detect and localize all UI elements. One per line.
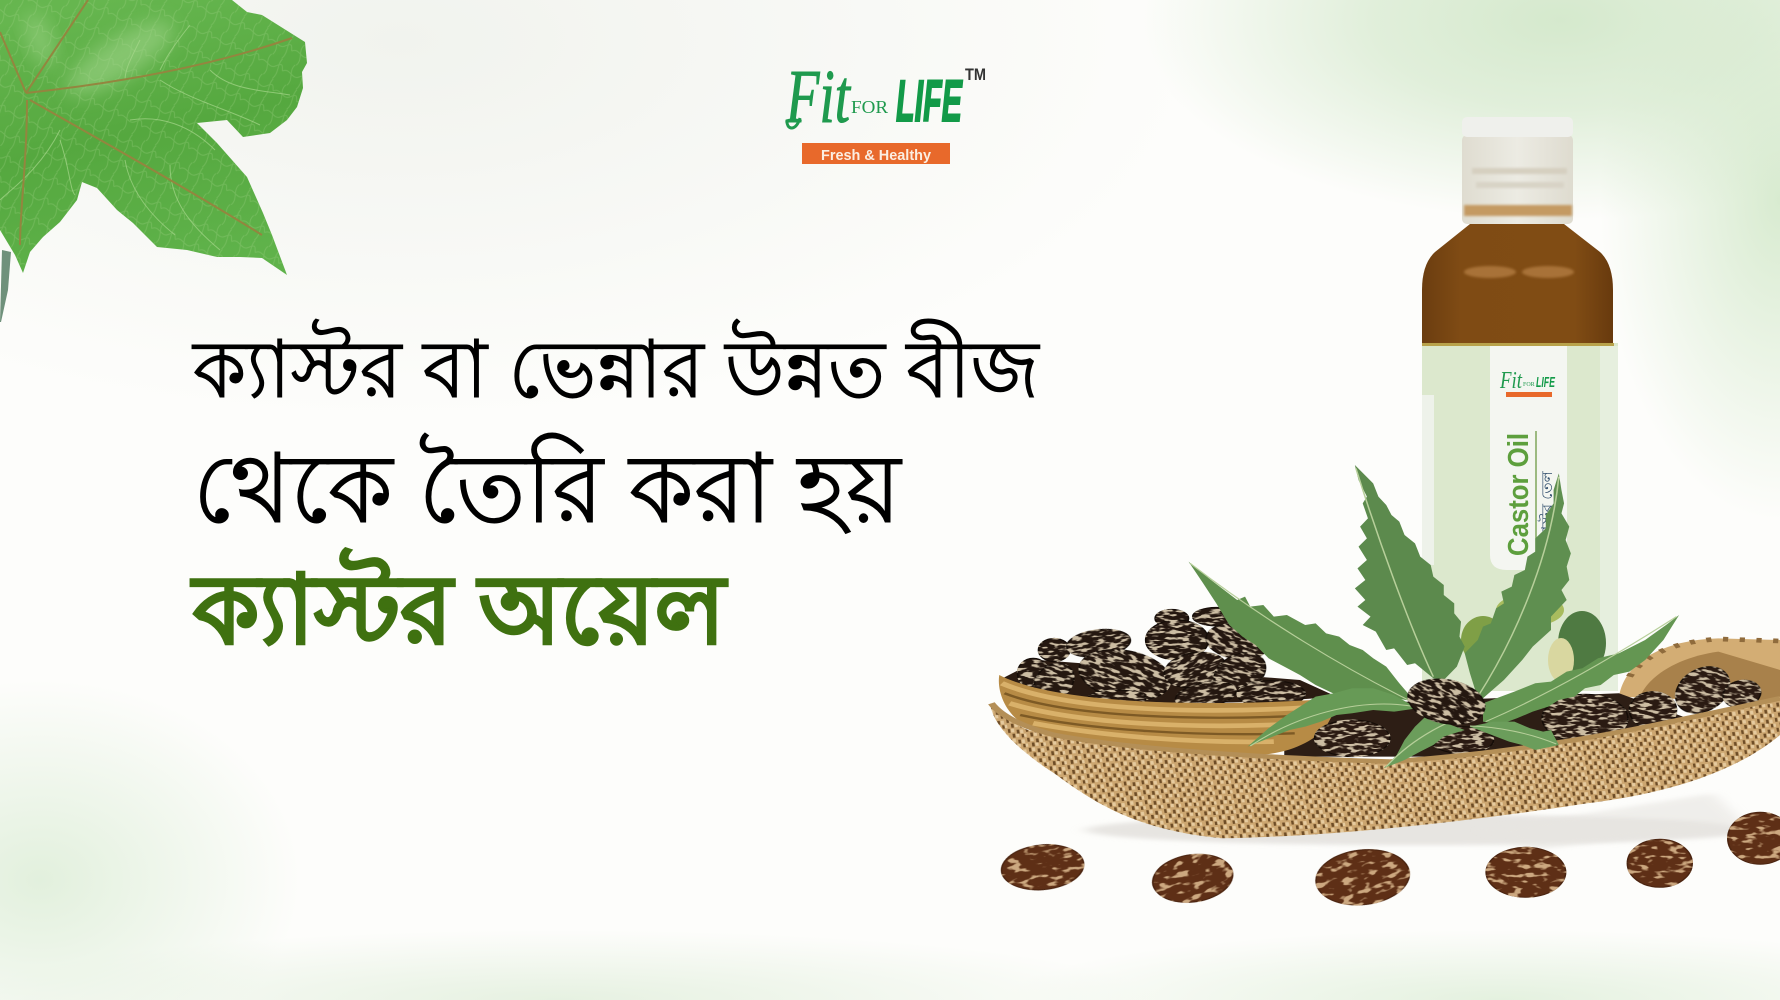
- small bowl: [999, 675, 1342, 755]
- bottle label: [1422, 343, 1618, 691]
- logo: Fit for Life: LIFE: [896, 69, 963, 134]
- basket shadow: [1086, 815, 1755, 845]
- basket back rim: [1619, 638, 1780, 703]
- bowl seeds: [1018, 607, 1305, 713]
- label logo: LIFE: [1536, 374, 1556, 391]
- bottle oil body: [1422, 224, 1613, 345]
- basket seeds: [1315, 662, 1767, 757]
- label product name: Castor Oil: [1503, 433, 1535, 556]
- dark inner basket: [1284, 693, 1692, 757]
- icon: castor leaf top-left: [0, 0, 307, 322]
- floor seeds: [992, 812, 1780, 916]
- label bengali name: ক্যাস্টর তেল: [1538, 470, 1556, 546]
- label logo: FOR: [1523, 382, 1535, 388]
- logo: Fit for Life: FOR: [851, 97, 888, 117]
- small bowl back: [999, 660, 1337, 703]
- logo: Fit for Life: Fit: [785, 55, 851, 139]
- logo: Fit for Life: [785, 55, 986, 164]
- label logo: [1499, 368, 1556, 397]
- logo: Fit for Life: TM: [965, 65, 986, 84]
- center seed: [1394, 670, 1498, 733]
- leaf in basket: [1189, 465, 1679, 768]
- label plant art: [1461, 594, 1606, 682]
- bottle: [1422, 117, 1618, 691]
- big basket front: [990, 697, 1780, 838]
- headline line 2: থেকে তৈরি করা হয়: [193, 436, 901, 543]
- label white strip: [1490, 346, 1567, 570]
- bottle cap: [1462, 117, 1573, 224]
- label logo: Fit: [1499, 368, 1523, 394]
- headline line 3: ক্যাস্টর অয়েল: [193, 557, 725, 664]
- basket group: [990, 465, 1780, 850]
- logo: Fit for Life: Fresh & Healthy: [821, 147, 932, 164]
- headline line 1: ক্যাস্টর বা ভেন্নার উন্নত বীজ: [193, 325, 1039, 414]
